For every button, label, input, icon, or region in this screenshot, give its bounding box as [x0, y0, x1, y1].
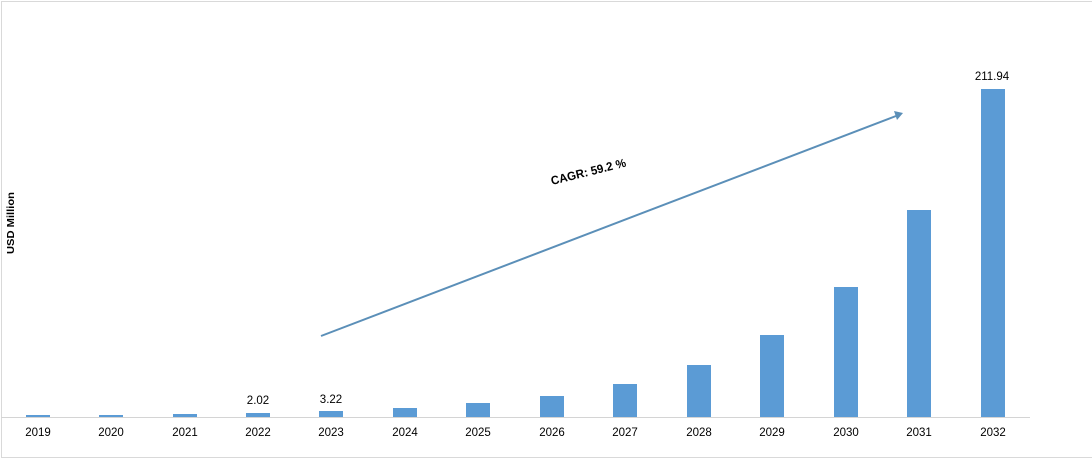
- data labels: 211.94: [975, 71, 1010, 83]
- x-axis year labels: 2030: [833, 427, 859, 439]
- arrow: CAGR growth trend: [321, 111, 903, 336]
- x-axis year labels: 2024: [392, 427, 418, 439]
- x-axis year labels: 2021: [172, 427, 198, 439]
- x-axis year labels: 2028: [686, 427, 712, 439]
- x-axis year labels: [25, 427, 1006, 439]
- data labels: 3.22: [320, 394, 342, 406]
- x-axis year labels: 2029: [759, 427, 785, 439]
- x-axis year labels: 2019: [25, 427, 51, 439]
- x-axis year labels: 2020: [98, 427, 124, 439]
- x-axis year labels: 2026: [539, 427, 565, 439]
- x-axis year labels: 2027: [612, 427, 638, 439]
- x-axis year labels: 2022: [245, 427, 271, 439]
- x-axis year labels: 2023: [318, 427, 344, 439]
- x-axis year labels: 2025: [465, 427, 491, 439]
- CAGR label: CAGR: 59.2 %: [549, 156, 628, 188]
- data labels: 2.02: [247, 395, 269, 407]
- bar chart: [26, 89, 1005, 417]
- data labels: [247, 71, 1010, 407]
- y-axis title: USD Million: [6, 192, 17, 254]
- x-axis year labels: 2031: [906, 427, 932, 439]
- x-axis year labels: 2032: [980, 427, 1006, 439]
